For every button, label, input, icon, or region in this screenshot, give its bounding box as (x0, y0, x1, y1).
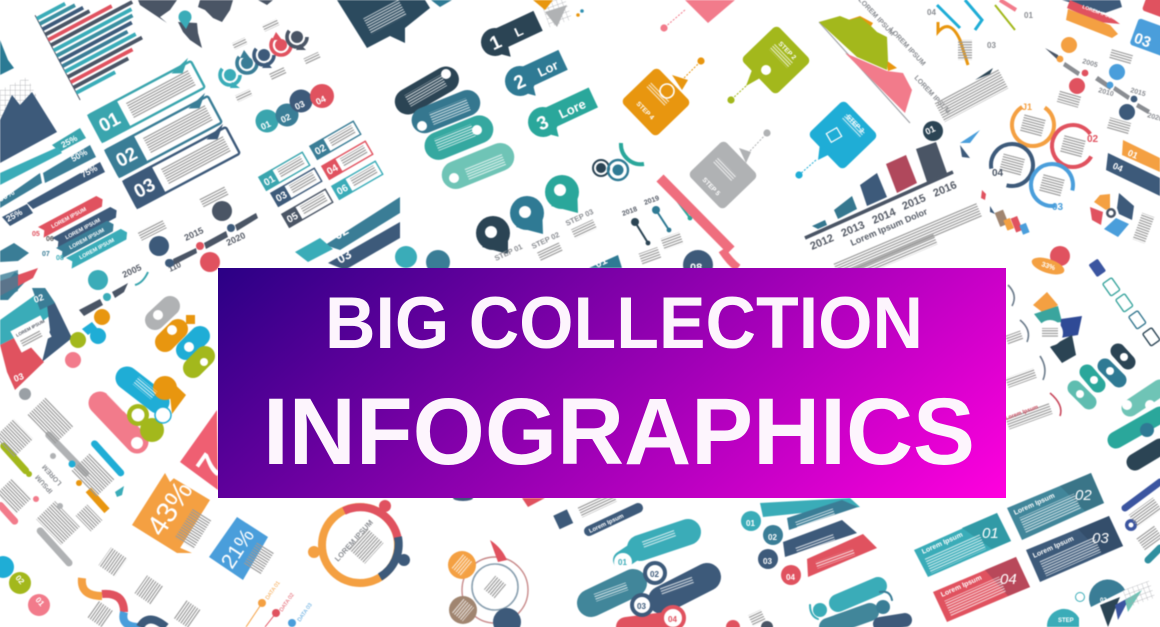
small tag cards 01-06: 05 (285, 210, 301, 226)
ribbons 05-08: 05 (32, 231, 40, 238)
lollipop timeline 2018-2019: 2019 (643, 195, 660, 207)
01 and 04 tags right: 01 (1126, 148, 1139, 161)
pink ribbon (660, 178, 738, 268)
lorem ipsum card 03 (1026, 516, 1123, 582)
ribbons 05-08 (0, 194, 130, 269)
partial items below banner (453, 495, 545, 507)
drops bottom left: 01 (33, 596, 46, 609)
01 and 04 tags right: 04 (1111, 161, 1124, 174)
timeline 2005-2020 (137, 186, 258, 272)
numbered cards 01-03 (86, 57, 240, 209)
donut chart lorem ipsum: LOREM IPSUM (333, 518, 375, 563)
bar chart 2012-2016: 2016 (931, 179, 959, 200)
percentage tile 21%: 21% (217, 525, 259, 573)
card 03: 03 (131, 174, 159, 203)
data legend: DATA 02 (279, 592, 296, 613)
step 1 callout top (660, 0, 735, 32)
winding step arrows (220, 19, 321, 102)
heading: big collection: BIG COLLECTION (325, 283, 923, 364)
card 02: 02 (113, 143, 141, 172)
lorem ipsum tag: Lorem Ipsum (588, 513, 625, 535)
angled bands 01-04: 04 (786, 573, 795, 582)
ribbons top right: LOREM IPSUM (1081, 4, 1117, 22)
01 and 04 tags right (1106, 140, 1160, 196)
card 01 (86, 57, 205, 143)
donut chart lorem ipsum (308, 500, 410, 583)
stacked speech bubbles (390, 62, 518, 193)
step 3 callout (795, 100, 878, 179)
ribbons 05-08: LOREM IPSUM (78, 237, 116, 261)
step capsules 01-04: 01 (618, 558, 627, 567)
step 4 callout: STEP 4 (635, 101, 655, 122)
card 03 (121, 123, 240, 209)
lorem ipsum card 04: Lorem Ipsum (940, 575, 983, 599)
timeline 2005-2020: 2020 (225, 230, 247, 248)
bar chart 2012-2016: 2015 (900, 192, 928, 213)
side list left (0, 388, 126, 568)
data legend (246, 580, 314, 627)
timeline right 2005-2020: 2010 (1097, 87, 1114, 98)
map pins step 01-03 (476, 175, 597, 263)
lorem ipsum card 01: Lorem Ipsum (921, 532, 964, 556)
ribbons top right (1062, 0, 1122, 38)
arrows block top right (927, 0, 1033, 65)
small tag cards 01-06: 06 (335, 182, 351, 198)
lorem ipsum card 04 (933, 557, 1030, 622)
card 01: 01 (96, 108, 124, 137)
percentage tile red: 7 (189, 447, 231, 485)
percentage tile 21% (209, 517, 274, 580)
arcs with text right of banner (1005, 285, 1061, 430)
timeline right 2005-2020: 2005 (1081, 58, 1098, 69)
ribbons 05-08: 06 (46, 236, 54, 243)
timeline 2005-2020: 2015 (183, 225, 205, 243)
segmented pie chart (1090, 193, 1154, 244)
chain of small circles (65, 259, 183, 368)
drops bottom left: 02 (13, 574, 26, 587)
device icons (1088, 259, 1160, 346)
bar chart 2012-2016: 2013 (839, 219, 867, 240)
stamp 33% (1030, 246, 1070, 278)
stamp 33%: 33% (1040, 261, 1057, 272)
chain of small circles: 110 (167, 260, 183, 274)
bar chart 2012-2016: 2012 (808, 232, 836, 253)
drops bottom left (0, 556, 50, 616)
ribbons 05-08: 07 (42, 251, 50, 258)
bar chart 2012-2016: 2014 (870, 206, 899, 227)
pill group upper left (153, 306, 208, 368)
angled bands 01-04: 01 (746, 519, 755, 528)
lorem ipsum card 03: 03 (1092, 530, 1109, 547)
square arrows lorem ipsum: 03 (12, 371, 25, 384)
percentage tile 43% (132, 473, 211, 553)
map pins step 01-03: STEP 03 (564, 207, 595, 228)
four rings J1-04 (988, 96, 1102, 213)
bar chart 2012-2016: Lorem Ipsum Dolor (849, 206, 929, 248)
partial items above banner (395, 246, 713, 280)
timeline right 2005-2020: 2015 (1129, 87, 1146, 98)
percent bars: 25% (59, 133, 79, 150)
chain of small circles: 2005 (121, 262, 143, 280)
wide bands 02 and 03 (295, 197, 400, 270)
small tag cards 01-06: 02 (313, 142, 329, 158)
arrows block top right: 04 (927, 8, 936, 17)
stacked area chart (819, 0, 951, 123)
bar chart 2012-2016: 01 (924, 124, 937, 137)
ribbons 05-08: LOREM IPSUM (50, 206, 88, 230)
area chart top left (0, 40, 57, 163)
lorem ipsum card 02: 02 (1075, 487, 1092, 504)
square arrows lorem ipsum (0, 288, 72, 390)
step circles 01-04: 02 (279, 112, 292, 125)
bottom capsules 01-02 (726, 586, 905, 627)
leaf diagram (1033, 292, 1082, 363)
percentage tile 43%: 43% (141, 476, 199, 542)
arrows block top right: 01 (1024, 11, 1033, 20)
ribbons 05-08: LOREM IPSUM (64, 217, 102, 241)
mini column chart (981, 190, 1030, 235)
snake timeline (82, 547, 201, 627)
percentage tile red (180, 410, 231, 490)
timeline right 2005-2020 (1045, 37, 1160, 135)
small tag cards 01-06: 03 (274, 189, 290, 205)
title banner (218, 268, 1006, 498)
partial items above banner: 01 (593, 255, 609, 271)
four rings J1-04: 04 (992, 168, 1004, 179)
step half circles (1047, 580, 1155, 627)
lorem ipsum card 01 (914, 513, 1011, 577)
lorem ipsum card 03: Lorem Ipsum (1032, 536, 1075, 560)
numbered labels 1-3: Lore (556, 96, 588, 122)
step 5 callout: STEP 5 (701, 177, 721, 198)
numbered labels 1-3: L (512, 23, 526, 40)
lorem ipsum card 04: 04 (1000, 571, 1017, 588)
arcs with text right of banner: Lorem Ipsum (1005, 404, 1039, 422)
triangles accent (960, 130, 980, 158)
numbered tiles far right (1129, 0, 1160, 58)
percent bars (0, 128, 105, 226)
dark speech panel top (337, 0, 452, 48)
wide bands 02 and 03: 02 (331, 222, 351, 243)
numbered labels 1-3: 1 (487, 31, 506, 55)
diagonal pill bands right (1116, 388, 1160, 462)
arrows block top right: 03 (987, 41, 996, 50)
square arrows lorem ipsum: 02 (32, 292, 45, 305)
percent bars: 75% (79, 163, 99, 180)
small chart top center (533, 0, 584, 27)
four rings J1-04: 02 (1087, 134, 1099, 145)
map pins step 01-03: STEP 01 (493, 242, 524, 263)
step 5 callout (688, 129, 771, 210)
step 2 callout: STEP 2 (777, 41, 797, 62)
lorem ipsum card 01: 01 (982, 525, 999, 542)
card 02 (103, 92, 222, 178)
lollipop timeline 2018-2019: 2018 (621, 206, 638, 218)
step capsules 01-04: 02 (650, 570, 659, 579)
step half circles: 02 (1100, 598, 1107, 604)
stacked area chart: LOREM IPSUM (913, 75, 951, 116)
angled bands 01-04 (741, 498, 877, 585)
step capsules 01-04: 03 (637, 602, 646, 611)
lorem ipsum card 02: Lorem Ipsum (1013, 493, 1056, 517)
small tag cards 01-06 (258, 121, 383, 228)
angled bands 01-04: 03 (763, 557, 772, 566)
partial items above banner: 08 (690, 262, 702, 274)
capsule flow diagram left (100, 376, 186, 449)
step 3 callout: STEP 3 (845, 114, 865, 135)
data legend: DATA 01 (265, 580, 282, 601)
step circles 01-04 (256, 84, 334, 132)
four rings J1-04: J1 (1022, 102, 1032, 112)
step circles 01-04: 03 (293, 99, 306, 112)
partial items left of banner (0, 268, 38, 300)
lorem ipsum card 02 (1007, 473, 1104, 540)
numbered labels 1-3: 2 (511, 71, 529, 94)
circular process (448, 540, 528, 627)
step half circles: STEP (1058, 618, 1074, 624)
world map with pin (138, 0, 273, 48)
ribbons 05-08: 08 (56, 255, 64, 262)
ribbons 05-08: LOREM IPSUM (68, 227, 106, 251)
numbered labels 1-3 (476, 9, 602, 146)
overlapping rings (593, 143, 644, 180)
side list left: IPSUM (34, 473, 54, 494)
horizontal bar chart (35, 0, 161, 100)
numbered tiles far right: 03 (1132, 30, 1153, 51)
side list left: LOREM (41, 463, 63, 486)
linked capsules right (1075, 351, 1128, 402)
heading: infographics: INFOGRAPHICS (263, 379, 975, 485)
step circles 01-04: 01 (259, 119, 272, 132)
step 2 callout (727, 25, 811, 104)
data legend: DATA 03 (297, 602, 314, 623)
square arrows lorem ipsum: LOREM IPSUM (15, 318, 46, 338)
small tag cards 01-06: 01 (262, 173, 278, 189)
percent bars: 50% (69, 147, 89, 164)
step 4 callout (621, 57, 705, 137)
small tag cards 01-06: 04 (325, 162, 341, 178)
numbered labels 1-3: Lor (535, 57, 560, 80)
four rings J1-04: 03 (1052, 202, 1064, 213)
numbered labels 1-3: 3 (534, 112, 552, 135)
percent bars: 25% (4, 207, 24, 224)
stacked area chart: LOREM IPSUM (888, 27, 926, 68)
map pins step 01-03: STEP 02 (530, 230, 561, 251)
step capsules 01-04 (591, 529, 707, 627)
step circles 01-04: 04 (314, 94, 327, 107)
angled bands 01-04: 02 (768, 533, 777, 542)
wide bands 02 and 03: 03 (334, 246, 354, 267)
step capsules 01-04: 04 (668, 615, 677, 624)
bar chart 2012-2016 (805, 121, 982, 291)
far right list bottom (1125, 482, 1160, 560)
lorem ipsum tag (553, 491, 638, 535)
lollipop timeline 2018-2019 (621, 195, 692, 265)
text block right of area chart (934, 68, 1008, 122)
